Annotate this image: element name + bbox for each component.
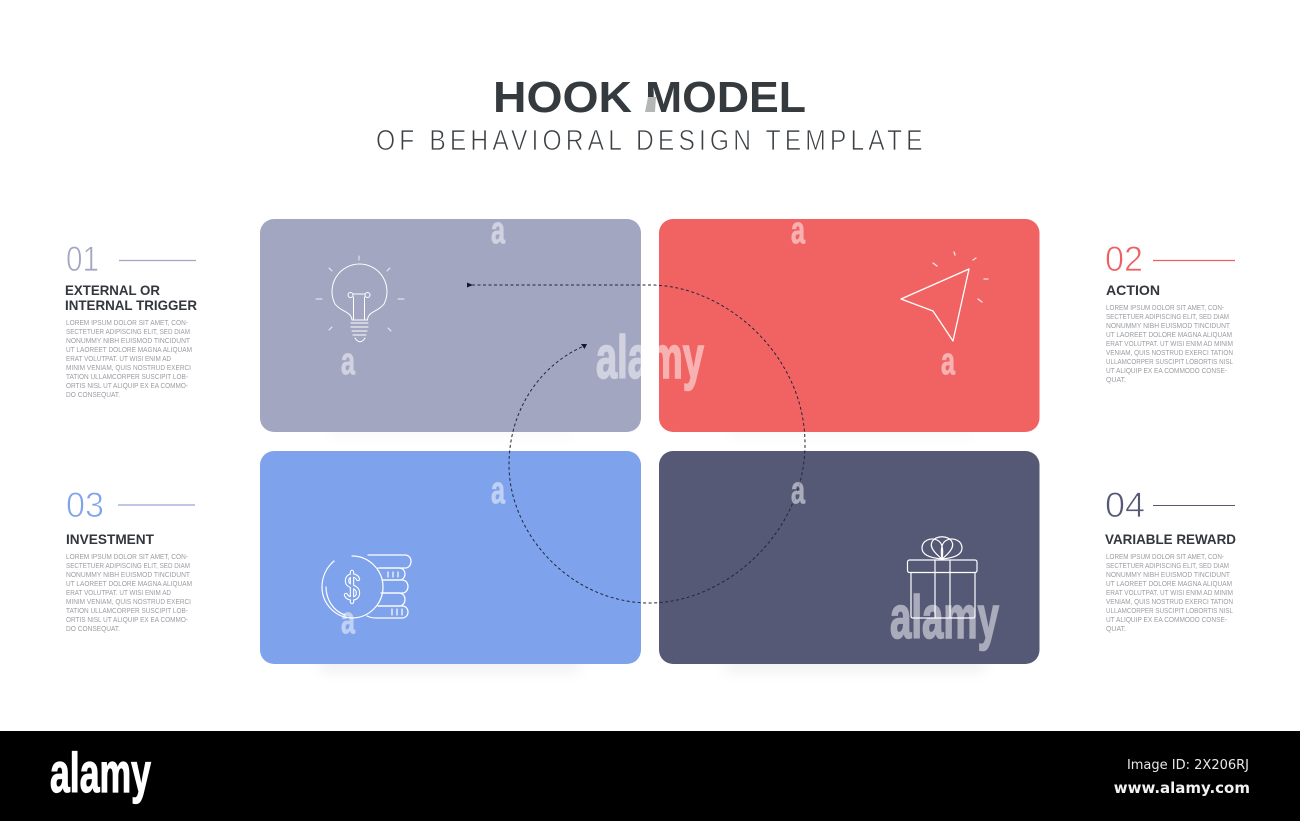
watermarks: a [341,341,356,383]
footer logo: alamy [50,741,151,804]
footer image id: Image ID: 2X206RJ [1127,758,1249,773]
watermarks: a [491,210,506,252]
block: 01 external or internal trigger: SECTETUER ADIPISCING ELIT, SED DIAM [66,329,190,336]
block: 02 action [1105,240,1235,384]
block: 03 investment: LOREM IPSUM DOLOR SIT AMET, CON- [66,554,189,561]
block: 01 external or internal trigger [65,240,197,399]
block: 02 action: ACTION [1106,282,1160,298]
block: 03 investment: NONUMMY NIBH EUISMOD TINCIDUNT [66,572,191,579]
block: 02 action: SECTETUER ADIPISCING ELIT, SED DIAM [1106,314,1229,321]
arrowhead: top [467,282,473,288]
block: 04 variable reward: UT ALIQUIP EX EA COMMODO CONSE- [1106,617,1228,624]
block: 02 action: UT LAOREET DOLORE MAGNA ALIQUAM [1106,332,1232,339]
block: 04 variable reward: SECTETUER ADIPISCING ELIT, SED DIAM [1106,563,1229,570]
footer bar [0,731,1300,821]
block: 04 variable reward: VARIABLE REWARD [1105,531,1236,547]
block: 02 action: UT ALIQUIP EX EA COMMODO CONSE- [1106,368,1228,375]
block: 01 external or internal trigger: NONUMMY NIBH EUISMOD TINCIDUNT [66,338,191,345]
panel: variable reward [659,451,1040,664]
icon: coin stack [322,555,411,618]
icon: paper plane [901,252,988,341]
block: 02 action: NONUMMY NIBH EUISMOD TINCIDUNT [1106,323,1231,330]
watermarks: a [791,470,806,512]
icon: gift box [908,537,977,618]
block: 04 variable reward [1105,486,1236,633]
watermarks [341,210,999,651]
block: 03 investment: TATION ULLAMCORPER SUSCIPIT LOB- [66,608,189,615]
block: 03 investment: INVESTMENT [66,531,154,547]
block: 04 variable reward: LOREM IPSUM DOLOR SIT AMET, CON- [1106,554,1225,561]
block: 04 variable reward: QUAT. [1106,626,1126,633]
panel: external or internal trigger [260,219,641,432]
panel: action [659,219,1040,432]
dashed cycle arrows [472,285,805,603]
block: 04 variable reward: VENIAM, QUIS NOSTRUD EXERCI TATION [1106,599,1233,606]
watermarks: alamy [596,324,704,391]
block: 04 variable reward: UT LAOREET DOLORE MAGNA ALIQUAM [1106,581,1232,588]
block: 01 external or internal trigger: DO CONSEQUAT. [66,392,120,399]
block: 04 variable reward: ERAT VOLUTPAT. UT WISI ENIM AD MINIM [1106,590,1233,597]
watermarks: a [941,341,956,383]
block: 03 investment: 03 [66,486,104,525]
block: 04 variable reward: 04 [1105,486,1145,525]
footer url: www.alamy.com [1114,779,1250,797]
block: 02 action: 02 [1105,240,1143,279]
block: 01 external or internal trigger: MINIM VENIAM, QUIS NOSTRUD EXERCI [66,365,191,372]
title: HOOK [493,73,632,122]
block: 02 action: QUAT. [1106,377,1126,384]
watermarks: a [791,210,806,252]
block: 02 action: ULLAMCORPER SUSCIPIT LOBORTIS NISL [1106,359,1233,366]
block: 01 external or internal trigger: INTERNAL TRIGGER [65,297,197,313]
block: 02 action: VENIAM, QUIS NOSTRUD EXERCI TATION [1106,350,1233,357]
block: 03 investment: ORTIS NISL UT ALIQUIP EX EA COMMO- [66,617,189,624]
watermarks: alamy [890,584,999,651]
watermarks: a [341,600,356,642]
icon: light bulb [316,256,404,342]
block: 03 investment: DO CONSEQUAT. [66,626,120,633]
title: MODEL [645,73,806,122]
block: 01 external or internal trigger: ERAT VOLUTPAT. UT WISI ENIM AD [66,356,171,363]
title [376,73,923,156]
block: 04 variable reward: NONUMMY NIBH EUISMOD TINCIDUNT [1106,572,1231,579]
block: 03 investment: MINIM VENIAM, QUIS NOSTRUD EXERCI [66,599,191,606]
block: 01 external or internal trigger: LOREM IPSUM DOLOR SIT AMET, CON- [66,320,189,327]
block: 01 external or internal trigger: EXTERNAL OR [65,282,160,298]
block: 01 external or internal trigger: TATION ULLAMCORPER SUSCIPIT LOB- [66,374,189,381]
block: 04 variable reward: ULLAMCORPER SUSCIPIT LOBORTIS NISL [1106,608,1233,615]
title: OF BEHAVIORAL DESIGN TEMPLATE [376,124,923,156]
arrowhead: inner [581,344,587,349]
block: 01 external or internal trigger: UT LAOREET DOLORE MAGNA ALIQUAM [66,347,192,354]
block: 02 action: ERAT VOLUTPAT. UT WISI ENIM AD MINIM [1106,341,1233,348]
block: 03 investment: UT LAOREET DOLORE MAGNA ALIQUAM [66,581,192,588]
panel: investment [260,451,641,664]
block: 03 investment: ERAT VOLUTPAT. UT WISI ENIM AD [66,590,171,597]
watermarks: a [491,470,506,512]
block: 01 external or internal trigger: 01 [66,240,99,279]
block: 03 investment [66,486,195,633]
block: 03 investment: SECTETUER ADIPISCING ELIT, SED DIAM [66,563,190,570]
block: 02 action: LOREM IPSUM DOLOR SIT AMET, CON- [1106,305,1225,312]
block: 01 external or internal trigger: ORTIS NISL UT ALIQUIP EX EA COMMO- [66,383,189,390]
card shadows [320,428,985,670]
